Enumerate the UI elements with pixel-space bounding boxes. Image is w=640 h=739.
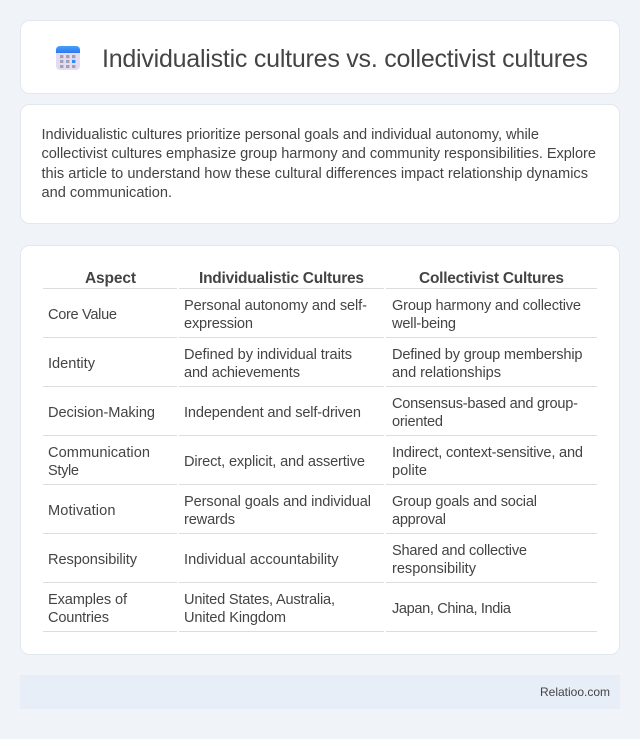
row: responsibility: Responsibility xyxy=(48,552,138,568)
text block: introduction xyxy=(42,127,596,201)
row: decision-making: Decision-Making xyxy=(48,405,155,421)
panel: title card xyxy=(20,20,620,94)
row: core value: Core Value xyxy=(48,307,117,323)
footer credit: Relatioo.com xyxy=(540,685,610,699)
row: examples of countries xyxy=(48,592,512,626)
row: motivation: Group goals and social xyxy=(392,494,537,510)
title: Individualistic cultures vs. collectivist cultures xyxy=(102,45,588,73)
row: identity: Identity xyxy=(48,356,96,372)
row: decision-making: Independent and self-driven xyxy=(184,405,361,421)
icon: calendar xyxy=(56,46,80,70)
text block: introduction: and communication. xyxy=(42,185,172,201)
row: motivation: Personal goals and individual xyxy=(184,494,371,510)
row: communication style xyxy=(48,445,583,479)
row: responsibility xyxy=(48,543,527,577)
table header: Aspect xyxy=(85,270,136,287)
row: examples of countries: United Kingdom xyxy=(184,610,286,626)
row: responsibility: Shared and collective xyxy=(392,543,527,559)
text block: introduction: Individualistic cultures prioritize personal goals and individual autonomy, while xyxy=(42,127,539,143)
row: decision-making xyxy=(48,396,578,430)
row: identity: Defined by individual traits xyxy=(184,347,352,363)
row: core value: Group harmony and collective xyxy=(392,298,581,314)
row: core value xyxy=(48,298,581,332)
row: communication style: polite xyxy=(392,463,427,479)
row: responsibility: responsibility xyxy=(392,561,477,577)
row: communication style: Communication xyxy=(48,445,150,461)
row: communication style: Indirect, context-sensitive, and xyxy=(392,445,583,461)
table header: Individualistic Cultures xyxy=(199,270,364,287)
row: identity xyxy=(48,347,582,381)
row: examples of countries: Japan, China, India xyxy=(392,601,512,617)
row: identity: and achievements xyxy=(184,365,300,381)
row: motivation: Motivation xyxy=(48,503,116,519)
row: communication style: Direct, explicit, and assertive xyxy=(184,454,365,470)
panel: introduction xyxy=(20,104,620,224)
row: motivation xyxy=(48,494,537,528)
row: decision-making: Consensus-based and group- xyxy=(392,396,578,412)
row: responsibility: Individual accountability xyxy=(184,552,339,568)
row: examples of countries: Countries xyxy=(48,610,109,626)
footer xyxy=(20,675,620,709)
row: motivation: rewards xyxy=(184,512,235,528)
row: core value: Personal autonomy and self- xyxy=(184,298,367,314)
row: core value: expression xyxy=(184,316,253,332)
row: decision-making: oriented xyxy=(392,414,443,430)
text block: introduction: collectivist cultures emphasize group harmony and community responsibilities. Explore xyxy=(42,146,596,162)
panel: comparison table xyxy=(20,246,620,654)
row: examples of countries: Examples of xyxy=(48,592,128,608)
row: identity: Defined by group membership xyxy=(392,347,582,363)
row: examples of countries: United States, Australia, xyxy=(184,592,335,608)
row: core value: well-being xyxy=(391,316,456,332)
table header: Collectivist Cultures xyxy=(419,270,564,287)
table header xyxy=(85,270,564,287)
row: motivation: approval xyxy=(392,512,446,528)
row: communication style: Style xyxy=(48,463,79,479)
row: identity: and relationships xyxy=(392,365,501,381)
text block: introduction: this article to understand how these cultural differences impact relationship dynamics xyxy=(42,166,588,182)
